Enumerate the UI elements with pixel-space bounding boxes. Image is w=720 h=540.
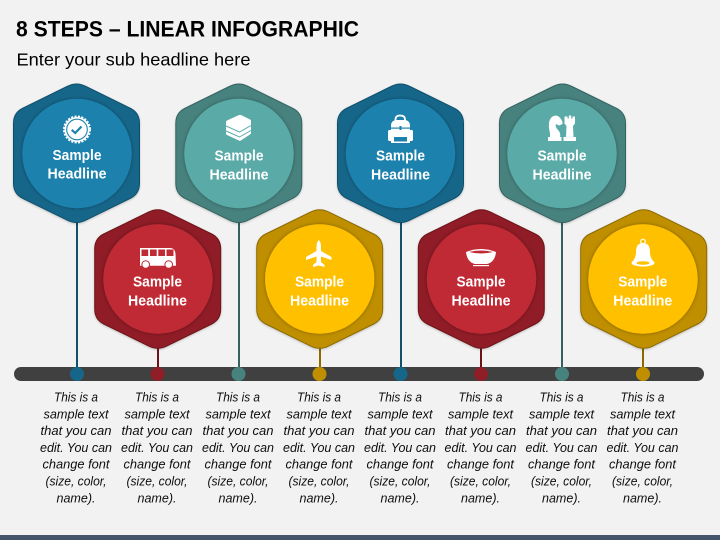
headline xyxy=(371,148,430,183)
step 3: connector and dot xyxy=(232,220,246,381)
text block: step 6: sample text xyxy=(448,407,514,421)
headline xyxy=(128,274,187,309)
text block: step 3: edit. You can xyxy=(202,441,274,455)
text block: step 1: that you can xyxy=(40,424,112,438)
step 8: connector and dot xyxy=(636,345,650,381)
text block: step 7: change font xyxy=(528,458,596,472)
text block: step 5: change font xyxy=(366,458,434,472)
text block: step 3: sample text xyxy=(206,407,271,421)
text block: step 2: edit. You can xyxy=(121,441,193,455)
text block: step 1 xyxy=(40,390,112,505)
panel: step 6 hexagon xyxy=(418,210,544,348)
text block: step 7 xyxy=(526,390,598,505)
text block: step 8: name). xyxy=(623,491,662,505)
text block: step 5: This is a xyxy=(378,390,422,404)
headline xyxy=(290,274,349,309)
panel: step 8 hexagon xyxy=(581,210,707,348)
icon: bus xyxy=(140,248,176,268)
icon: stack of books xyxy=(226,115,251,141)
text block: step 5 xyxy=(364,390,436,505)
text block: step 3: (size, color, xyxy=(208,474,268,488)
panel: step 4 hexagon xyxy=(257,210,383,348)
text block: step 2: sample text xyxy=(124,407,190,421)
icon: airplane xyxy=(306,240,332,267)
text block: step 4: edit. You can xyxy=(283,441,355,455)
text block: step 4: sample text xyxy=(286,407,352,421)
text block: step 3: name). xyxy=(218,491,258,505)
text block: step 6: that you can xyxy=(445,424,516,438)
icon: backpack xyxy=(388,116,413,143)
text block: step 2: change font xyxy=(124,458,191,472)
text block: step 3: change font xyxy=(204,458,272,472)
text block: step 5: that you can xyxy=(364,424,436,438)
text block: step 1: This is a xyxy=(54,390,98,404)
headline xyxy=(48,148,106,182)
headline: Headline xyxy=(532,167,592,183)
headline xyxy=(210,148,268,183)
text block: step 5: name). xyxy=(380,491,420,505)
headline: Sample xyxy=(376,148,425,164)
text block: step 8: change font xyxy=(609,458,677,472)
text block: step 7: (size, color, xyxy=(531,474,592,488)
text block: step 4 xyxy=(283,390,355,505)
text block: step 3 xyxy=(202,390,274,505)
text block: step 8 xyxy=(606,390,679,505)
step 6: connector and dot xyxy=(474,345,488,381)
text block: step 4: (size, color, xyxy=(288,474,350,488)
text block: step 6: name). xyxy=(461,491,500,505)
step 5: connector and dot xyxy=(394,220,408,381)
text block: step 4: name). xyxy=(300,491,338,505)
headline: Headline xyxy=(371,167,430,183)
text block: step 7: edit. You can xyxy=(526,441,598,455)
headline: Sample xyxy=(538,148,586,164)
text block: step 1: edit. You can xyxy=(40,441,112,455)
text block: step 6: This is a xyxy=(458,390,503,404)
panel: step 5 hexagon xyxy=(338,84,464,223)
title: 8 STEPS – LINEAR INFOGRAPHIC xyxy=(16,16,359,42)
headline: Sample xyxy=(618,274,667,290)
panel: step 1 hexagon xyxy=(14,84,140,223)
panel: step 7 hexagon xyxy=(500,84,626,223)
text block: step 5: sample text xyxy=(368,407,433,421)
text block: step 2: name). xyxy=(138,491,176,505)
text block: step 6: change font xyxy=(447,458,515,472)
text block: step 5: edit. You can xyxy=(364,441,436,455)
timeline bar xyxy=(14,367,704,381)
text block: step 8: that you can xyxy=(607,424,678,438)
text block: step 1: sample text xyxy=(44,407,109,421)
text block: step 6 xyxy=(444,390,517,505)
headline: Sample xyxy=(133,274,182,290)
text block: step 1: name). xyxy=(56,491,96,505)
headline: Sample xyxy=(52,148,102,164)
headline: Sample xyxy=(456,274,506,290)
text block: step 2: (size, color, xyxy=(126,474,188,488)
headline xyxy=(532,148,592,183)
icon: bell xyxy=(632,239,654,266)
headline: Headline xyxy=(613,293,672,309)
headline: Headline xyxy=(452,293,510,309)
step 2: connector and dot xyxy=(150,345,164,381)
text block: step 4: change font xyxy=(286,458,353,472)
text block: step 4: This is a xyxy=(297,390,341,404)
icon: bowl xyxy=(466,249,496,266)
text block: step 8: This is a xyxy=(620,390,665,404)
text block: step 3: This is a xyxy=(216,390,260,404)
panel: step 3 hexagon xyxy=(176,84,302,223)
headline xyxy=(613,274,672,309)
text block: step 8: sample text xyxy=(610,407,676,421)
footer strip xyxy=(0,535,720,540)
headline: Headline xyxy=(128,293,187,309)
text block: step 2 xyxy=(121,390,193,505)
text block: step 2: This is a xyxy=(135,390,179,404)
text block: step 8: (size, color, xyxy=(612,474,673,488)
text block: step 3: that you can xyxy=(202,424,274,438)
headline: Headline xyxy=(210,167,268,183)
text block: step 1: (size, color, xyxy=(46,474,106,488)
step 7: connector and dot xyxy=(555,220,569,381)
headline: Headline xyxy=(290,293,349,309)
step 4: connector and dot xyxy=(312,345,326,381)
headline: Sample xyxy=(214,148,264,164)
text block: step 7: that you can xyxy=(526,424,597,438)
icon: badge with check xyxy=(64,117,90,142)
text block: step 5: (size, color, xyxy=(370,474,430,488)
text block: step 2: that you can xyxy=(122,424,193,438)
text block: step 6: (size, color, xyxy=(450,474,511,488)
subtitle: Enter your sub headline here xyxy=(16,50,250,70)
panel: step 2 hexagon xyxy=(95,210,221,348)
step 1: connector and dot xyxy=(70,220,84,381)
icon: chess knight and rook xyxy=(548,116,576,141)
text block: step 7: name). xyxy=(542,491,581,505)
headline xyxy=(452,274,510,309)
text block: step 8: edit. You can xyxy=(606,441,679,455)
text block: step 7: sample text xyxy=(529,407,595,421)
text block: step 4: that you can xyxy=(284,424,355,438)
text block: step 6: edit. You can xyxy=(444,441,517,455)
text block: step 7: This is a xyxy=(540,390,584,404)
headline: Headline xyxy=(48,166,106,182)
text block: step 1: change font xyxy=(42,458,110,472)
headline: Sample xyxy=(295,274,344,290)
